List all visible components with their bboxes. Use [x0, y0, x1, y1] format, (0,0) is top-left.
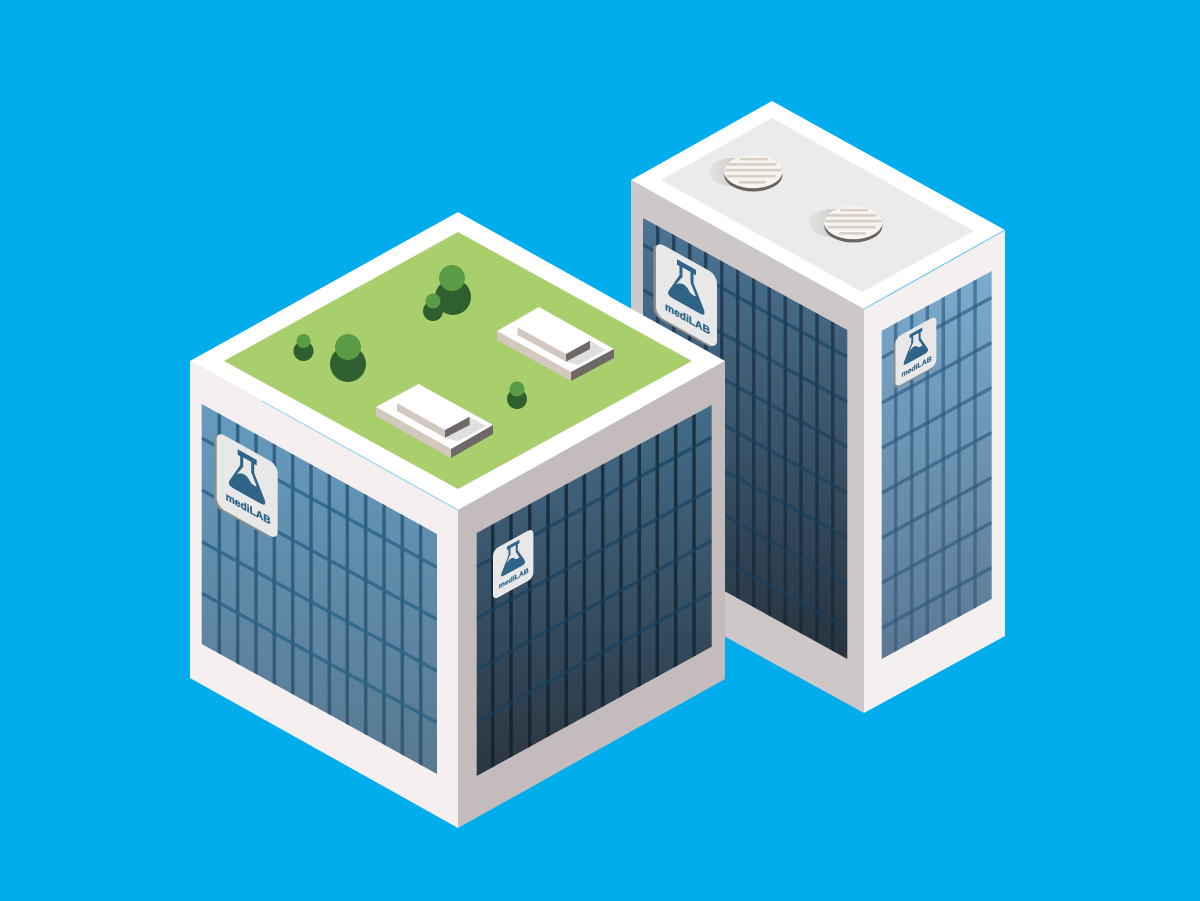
block right window wall [477, 400, 712, 790]
tree: large back [435, 265, 471, 315]
block roof edge highlight [262, 401, 458, 510]
roof vent 1 [709, 155, 782, 192]
sign: mediLAB on tower left wall [654, 240, 717, 351]
tower roof [631, 101, 1005, 309]
sign: mediLAB on block left wall [214, 430, 278, 542]
tower roof edge highlight [864, 230, 1005, 309]
tree: large left [330, 334, 366, 382]
sign: mediLAB on block right wall [493, 528, 533, 600]
roof vent 2 [809, 206, 882, 242]
building: front block [190, 212, 725, 828]
green roof lawn [224, 232, 692, 489]
block right wall [458, 361, 725, 828]
block left wall [190, 361, 458, 828]
illustration: two isometric mediLAB buildings on blue background [190, 101, 1006, 828]
tower left wall [631, 180, 864, 713]
tree: small back [423, 294, 443, 321]
block left window wall [202, 400, 437, 790]
sign: mediLAB on tower left wall: mediLAB [665, 301, 710, 338]
tower right wall [864, 230, 1005, 713]
tree: small left [294, 334, 314, 361]
sign: mediLAB on block right wall: mediLAB [499, 565, 529, 591]
sign: mediLAB on block left wall: mediLAB [226, 491, 271, 528]
tree: small right [507, 382, 527, 409]
rooftop unit: upper right [497, 307, 614, 381]
sign: mediLAB on tower right wall: mediLAB [902, 354, 932, 379]
sign: mediLAB on tower right wall [894, 315, 936, 390]
rooftop unit: lower centre [376, 384, 493, 458]
tower left window wall [643, 200, 847, 680]
block roof [190, 212, 725, 510]
building: rear tower [631, 101, 1005, 713]
tower right window wall [882, 260, 992, 670]
tower roof inner panel [661, 118, 974, 292]
